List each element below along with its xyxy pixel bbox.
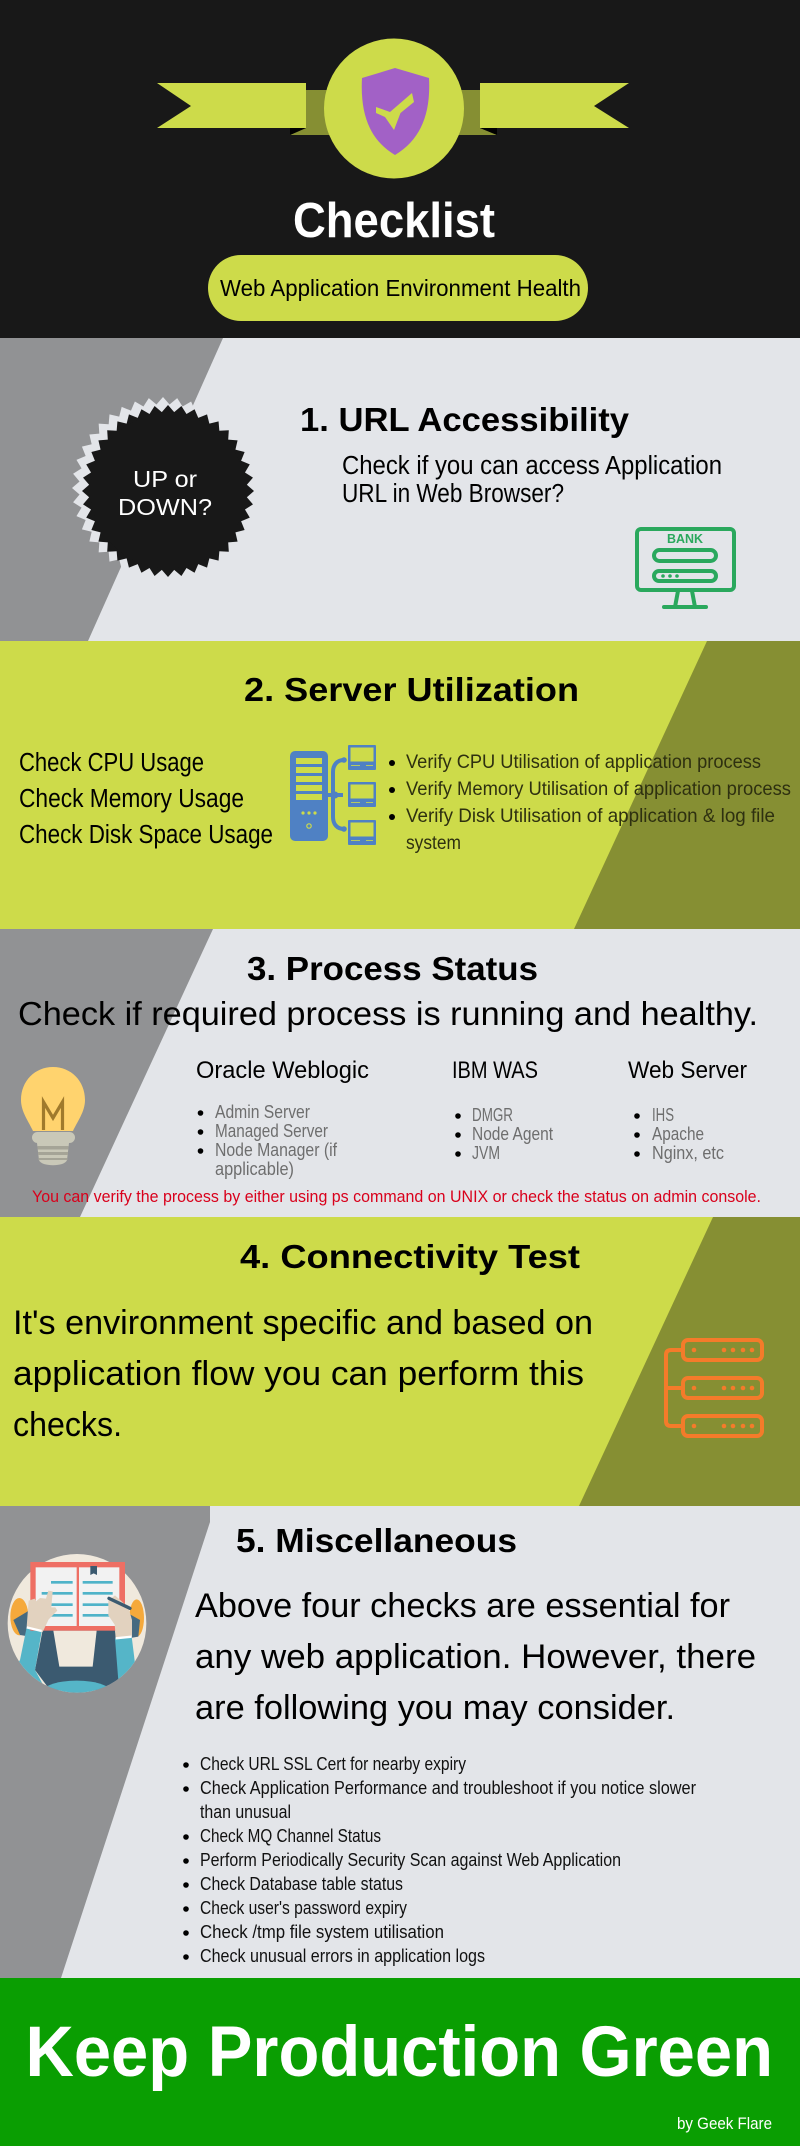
panel: 3. Process Status (0, 929, 800, 1217)
column: Web Server: Web Server (628, 1057, 747, 1084)
column: Web Server (628, 1057, 747, 1163)
consider list: Check unusual errors in application logs (200, 1946, 485, 1966)
icon: bank login monitor: BANK (667, 531, 704, 546)
description (13, 1304, 593, 1444)
left checks: Check Disk Space Usage (19, 821, 273, 849)
byline: by Geek Flare (677, 2114, 772, 2133)
consider list: than unusual (200, 1802, 291, 1822)
icon: light bulb (21, 1067, 85, 1165)
icon: bank login monitor (637, 529, 734, 607)
panel: 5. Miscellaneous (0, 1506, 800, 1978)
panel: header (0, 0, 800, 338)
left checks: Check CPU Usage (19, 749, 204, 777)
heading: 3. Process Status (247, 950, 538, 987)
verify list: Verify Disk Utilisation of application & log file (406, 805, 775, 827)
consider list: Check MQ Channel Status (200, 1826, 381, 1846)
left checks (19, 749, 273, 849)
heading: 2. Server Utilization (244, 671, 579, 708)
description: Above four checks are essential for (195, 1587, 730, 1625)
red note: You can verify the process by either using ps command on UNIX or check the status on admin console. (32, 1188, 761, 1206)
panel: 2. Server Utilization (0, 641, 800, 929)
column: IBM WAS: JVM (472, 1143, 500, 1163)
consider list: Check Database table status (200, 1874, 403, 1894)
icon: server network (290, 745, 376, 845)
badge: UP or DOWN: DOWN? (118, 494, 212, 520)
description: application flow you can perform this (13, 1355, 584, 1393)
title: Checklist (293, 194, 495, 248)
subtitle pill (208, 255, 588, 321)
consider list: Check user's password expiry (200, 1898, 407, 1918)
description (342, 452, 722, 508)
icon: ribbon badge with shield (157, 38, 629, 178)
description: any web application. However, there (195, 1638, 756, 1676)
description: are following you may consider. (195, 1689, 675, 1727)
description: Check if you can access Application (342, 452, 722, 480)
consider list: Perform Periodically Security Scan against Web Application (200, 1850, 621, 1870)
column: Oracle Weblogic: Oracle Weblogic (196, 1057, 369, 1084)
consider list: Check /tmp file system utilisation (200, 1922, 444, 1942)
column: Oracle Weblogic: applicable) (215, 1159, 294, 1179)
subtitle pill: Web Application Environment Health (220, 275, 581, 301)
verify list: system (406, 832, 461, 854)
icon: person reading book (8, 1554, 146, 1707)
column: Web Server: IHS (652, 1105, 674, 1125)
column: Web Server: Apache (652, 1124, 704, 1144)
description (195, 1587, 756, 1727)
column: IBM WAS: DMGR (472, 1105, 513, 1125)
verify list (389, 751, 791, 854)
column: Oracle Weblogic: Admin Server (215, 1102, 310, 1122)
footer headline: Keep Production Green (26, 2013, 773, 2092)
panel: 1. URL Accessibility (0, 338, 800, 641)
description: It's environment specific and based on (13, 1304, 593, 1342)
column: IBM WAS: IBM WAS (452, 1057, 538, 1084)
consider list: Check URL SSL Cert for nearby expiry (200, 1754, 466, 1774)
column: Web Server: Nginx, etc (652, 1143, 724, 1163)
description: URL in Web Browser? (342, 480, 564, 508)
verify list: Verify CPU Utilisation of application process (406, 751, 761, 773)
consider list: Check Application Performance and troubleshoot if you notice slower (200, 1778, 696, 1798)
badge: UP or DOWN (72, 397, 254, 579)
consider list (183, 1754, 696, 1966)
heading: 5. Miscellaneous (236, 1522, 517, 1559)
description: checks. (13, 1406, 122, 1444)
left checks: Check Memory Usage (19, 785, 244, 813)
description: Check if required process is running and healthy. (18, 995, 758, 1032)
column: IBM WAS: Node Agent (472, 1124, 553, 1144)
heading: 4. Connectivity Test (240, 1238, 580, 1275)
panel: 4. Connectivity Test (0, 1217, 800, 1506)
column: Oracle Weblogic: Node Manager (if (215, 1140, 338, 1160)
heading: 1. URL Accessibility (300, 401, 630, 438)
panel: footer (0, 1978, 800, 2146)
icon: connected servers (666, 1340, 762, 1436)
column: Oracle Weblogic: Managed Server (215, 1121, 328, 1141)
badge: UP or DOWN: UP or (133, 466, 197, 492)
column: IBM WAS (452, 1057, 553, 1163)
column: Oracle Weblogic (196, 1057, 369, 1179)
